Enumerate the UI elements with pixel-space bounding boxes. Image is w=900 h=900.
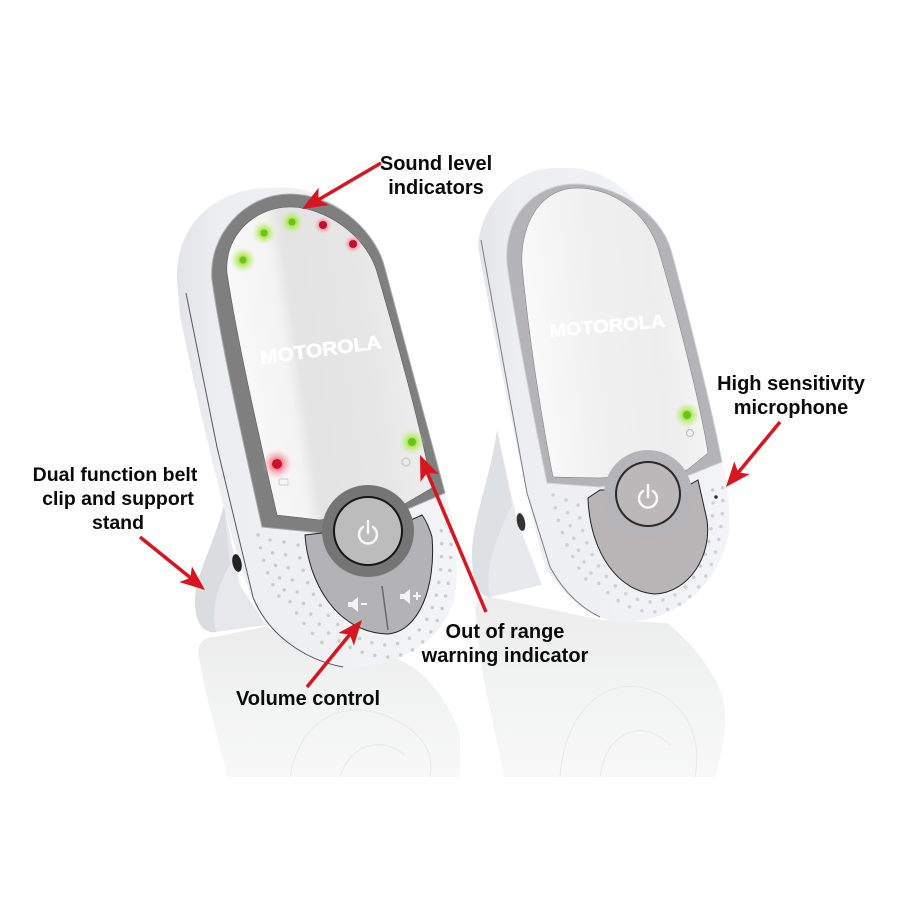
battery LED	[262, 449, 292, 485]
headphone jack	[231, 553, 243, 573]
label: out of range warning: Out of range	[446, 621, 564, 643]
power ring	[604, 450, 692, 538]
label: sound level indicators: indicators	[388, 177, 484, 199]
sound level LEDs	[230, 210, 362, 273]
arrow: belt clip	[140, 537, 211, 598]
power icon	[639, 485, 657, 507]
seam line	[186, 293, 343, 667]
volume down icon	[348, 597, 367, 612]
label: volume control: Volume control	[236, 688, 380, 710]
body shell	[177, 188, 457, 668]
bezel frame	[507, 184, 722, 487]
label: belt clip and stand: stand	[92, 512, 144, 534]
seam line	[481, 240, 600, 617]
microphone hole	[714, 495, 718, 499]
support stand clip	[472, 430, 542, 597]
display window	[227, 207, 432, 520]
label: belt clip and stand: clip and support	[42, 488, 194, 510]
reflections below the devices	[198, 597, 725, 777]
power button	[335, 498, 401, 564]
volume pad	[305, 515, 433, 634]
out of range LED	[399, 429, 425, 466]
arrow: sound level	[297, 163, 381, 218]
label: high sensitivity microphone: microphone	[734, 397, 848, 419]
power icon	[359, 521, 377, 543]
body shell	[478, 168, 729, 622]
volume up icon	[400, 589, 421, 604]
bezel frame	[212, 194, 445, 533]
volume seam	[382, 586, 388, 630]
headphone jack	[515, 512, 527, 532]
support stand clip	[195, 505, 266, 632]
power button	[617, 463, 679, 525]
logo: MOTOROLA	[549, 311, 666, 341]
speaker dots	[258, 520, 451, 657]
speaker dots	[553, 475, 723, 612]
device: right baby unit	[472, 168, 729, 622]
lower pad	[588, 480, 708, 594]
label: sound level indicators: Sound level	[380, 153, 492, 175]
device: left parent unit	[177, 188, 457, 668]
label: high sensitivity microphone: High sensitivity	[717, 373, 866, 395]
label: out of range warning: warning indicator	[421, 645, 589, 667]
arrow: microphone	[718, 422, 780, 493]
label: belt clip and stand: Dual function belt	[33, 464, 198, 486]
display window	[522, 188, 708, 478]
arrow: out of range	[411, 451, 486, 612]
arrow: volume control	[307, 614, 370, 687]
power ring	[322, 485, 414, 577]
power LED	[674, 402, 700, 436]
logo: MOTOROLA	[259, 332, 383, 369]
